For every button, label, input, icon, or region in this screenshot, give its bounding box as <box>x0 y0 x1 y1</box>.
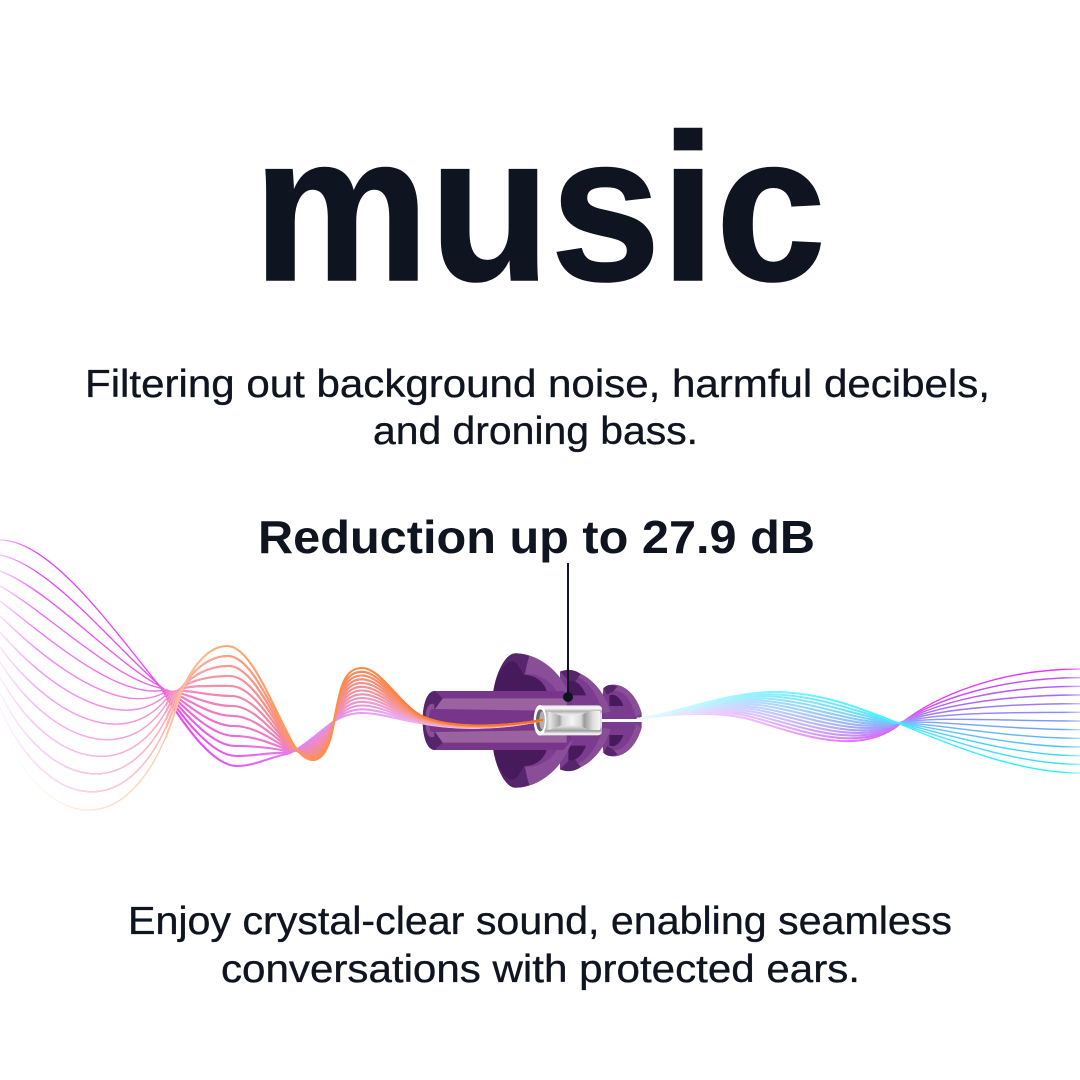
sound wave: filtered output <box>637 669 1080 773</box>
reduction heading: Reduction up to 27.9 dB <box>258 511 815 563</box>
metal filter tube <box>534 705 602 736</box>
sound wave: incoming noise <box>0 540 543 810</box>
intro text: Filtering out background noise, harmful decibels, <box>85 363 990 406</box>
closing text: conversations with protected ears. <box>221 948 860 991</box>
callout line with dot <box>563 563 573 702</box>
title: music <box>253 92 826 325</box>
intro text <box>85 363 990 453</box>
closing text <box>128 900 952 991</box>
intro text: and droning bass. <box>373 410 698 453</box>
closing text: Enjoy crystal-clear sound, enabling seamless <box>128 900 952 943</box>
icon: earplug <box>423 653 643 788</box>
